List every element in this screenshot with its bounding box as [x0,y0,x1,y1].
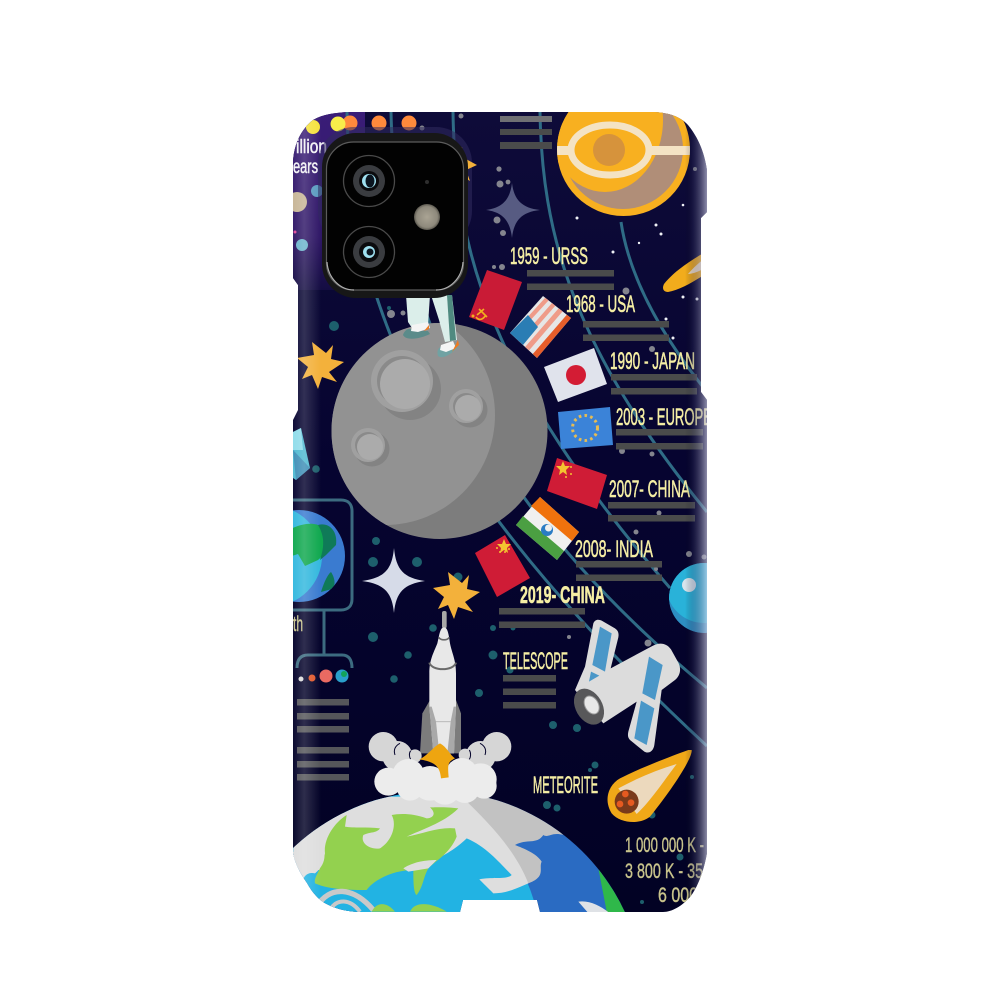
smoke clouds [369,732,511,805]
label: 1959 URSS: 1959 - URSS [510,243,588,270]
camera module [322,133,468,298]
label: 1990 Japan: 1990 - JAPAN [610,348,695,375]
medium crater [449,389,488,428]
small earth [222,506,345,606]
flag: China 2019 [475,535,530,597]
connector bracket [297,610,352,668]
text: million years: illion [296,137,327,158]
earth globe [188,774,633,920]
big crater [371,350,441,420]
temperature text [625,837,704,902]
timeline dots [287,116,416,251]
left text bars [297,699,349,780]
orbit lines [347,112,707,746]
label: 1968 USA: 1968 - USA [566,291,635,318]
left crystal [293,428,310,480]
grey sparkle [486,183,540,238]
phone case body [293,112,707,912]
temperature text: 3 800 K - 35 0 [625,860,715,883]
astronaut legs [403,295,459,357]
flag: USSR [469,270,522,330]
flag: India [516,497,579,560]
top text bars [500,116,552,149]
phone case body: TELESCOPE [503,648,568,675]
case background [293,112,707,912]
upper solar panel [592,627,612,672]
moon [332,323,548,539]
phone case body: METEORITE [533,772,598,799]
label: 2007 China: 2007- CHINA [609,476,690,503]
label: telescope [503,648,568,708]
label: 2008 India [575,536,662,581]
lens top [344,156,394,206]
rocket flame [419,743,455,778]
temperature text: 6 000 [658,884,698,907]
front smoke [374,758,497,805]
left edge highlight [293,112,321,912]
telescope satellite [568,620,680,753]
rocket body [429,627,456,753]
gold star bottom [433,572,480,619]
label: 2019 China [499,582,605,628]
flash [414,204,440,230]
satellite frame and tube [575,620,680,753]
label: 1959 URSS [510,243,614,290]
small crater [351,428,390,466]
background star dots [312,114,706,904]
flag: Japan [544,348,607,402]
right solar panel [642,657,663,700]
blue planet [669,563,707,633]
text fragment: earth: th [293,613,303,636]
purple timeline panel [293,112,365,290]
label: 1968 USA [566,291,669,341]
gold star left [297,342,344,389]
white sparkle [362,548,425,613]
small planets row [298,670,348,682]
label: 2003 Europe [616,408,707,450]
earth diagram box [222,500,352,610]
camera halo [318,127,472,247]
telescope lens [574,688,604,725]
label: 2008 India: 2008- INDIA [575,536,653,563]
text: million years [293,138,326,174]
small gold star behind camera [445,147,477,181]
flag: Europe [558,407,613,449]
antenna [442,611,447,628]
rocket [420,611,461,753]
lower solar panel [634,701,654,745]
label: 2003 Europe: 2003 - EUROPE [616,404,712,431]
label: 1990 Japan [610,348,697,394]
label: 2019 China: 2019- CHINA [520,582,605,609]
microphone [425,180,429,184]
lens bottom [344,226,394,278]
fins [420,700,461,753]
right edge highlight [685,112,707,912]
label: 2007 China [608,476,695,522]
text: million years: ears [293,157,318,178]
flag: USA [510,296,571,358]
comet top right [663,254,701,292]
back smoke [369,732,511,771]
meteorite [608,750,692,822]
temperature text: 1 000 000 K - 2 [625,834,715,857]
gas giant planet [557,112,690,216]
flag: China 2007 [547,458,607,509]
